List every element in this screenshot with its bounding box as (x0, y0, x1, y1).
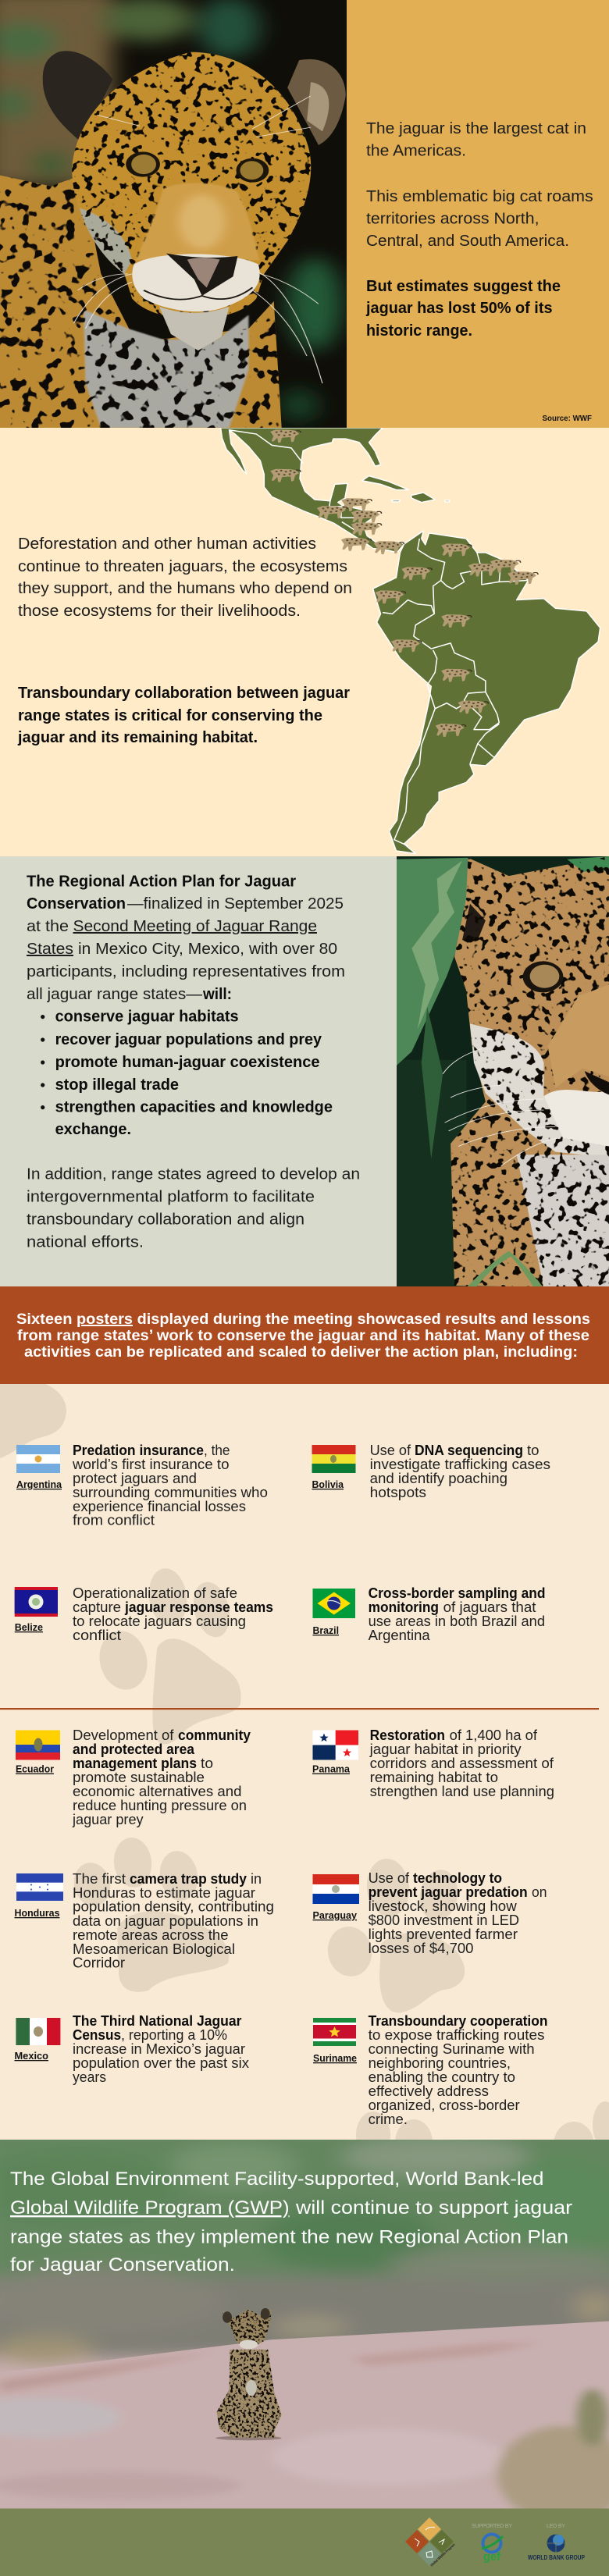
text: intergovernmental platform: transboundary collaboration and align (27, 1212, 304, 1229)
text: intergovernmental platform: In addition, range states agreed to develop an (27, 1166, 360, 1183)
item: Bolivia: to (527, 1443, 539, 1458)
photo: jaguar sitting on dirt road (0, 2119, 609, 2523)
text: transboundary collaboration: jaguar and its remaining habitat. (17, 729, 258, 746)
item: Belize: conflict (73, 1628, 121, 1643)
flag: Bolivia (312, 1445, 356, 1473)
item: Honduras: Honduras (14, 1907, 59, 1919)
item: Bolivia: hotspots (370, 1485, 426, 1500)
item: Ecuador: community (178, 1727, 251, 1743)
text: action plan intro: all jaguar range states— (27, 986, 202, 1003)
item: Honduras: Corridor (73, 1955, 125, 1971)
item: Argentina: protect jaguars and (73, 1471, 197, 1486)
item: Suriname: organized, cross-border (369, 2097, 520, 2113)
item: Honduras: The first (73, 1871, 126, 1887)
footer band with logos (0, 2509, 609, 2576)
item: Paraguay (312, 1870, 547, 1956)
flag: Suriname (313, 2018, 356, 2046)
item: Bolivia (312, 1443, 550, 1500)
item: Argentina (16, 1443, 268, 1528)
text: Global Wildlife Program support: will continue to support jaguar (295, 2197, 572, 2218)
text: jaguar facts: Central, and South America. (366, 233, 569, 250)
panel: regional action plan (0, 856, 397, 1286)
item: Brazil: Cross-border sampling and (369, 1585, 545, 1601)
item: Bolivia: DNA sequencing (415, 1443, 523, 1458)
item: Mexico: , reporting a 10% (121, 2027, 227, 2043)
logo: World Bank Group: WORLD BANK GROUP (528, 2554, 586, 2561)
text: intergovernmental platform: national efforts. (27, 1233, 144, 1251)
item: Panama: Panama (312, 1763, 351, 1775)
item: Mexico: Census (73, 2027, 121, 2043)
text: Global Wildlife Program support: for Jaguar Conservation. (10, 2254, 235, 2275)
item: Panama: jaguar habitat in priority (369, 1742, 522, 1757)
item: Belize: to relocate jaguars causing (73, 1614, 246, 1629)
item: Argentina: Predation insurance (73, 1443, 204, 1458)
flag: Honduras (16, 1873, 63, 1901)
item: Suriname: Transboundary cooperation (369, 2013, 548, 2029)
item: Honduras: data on jaguar populations in (73, 1913, 258, 1929)
text: jaguar facts: territories across North, (366, 211, 539, 228)
item: Honduras: population density, contributing (73, 1899, 274, 1915)
item: Brazil: Argentina (369, 1628, 431, 1643)
item: Suriname: enabling the country to (369, 2069, 515, 2085)
jaguar markers (270, 429, 538, 737)
list: action plan goals (41, 1009, 333, 1138)
item: Paraguay: losses of $4,700 (369, 1941, 473, 1956)
item: Suriname (313, 2013, 548, 2127)
item: Ecuador: Development of (73, 1727, 174, 1743)
item: Suriname: to expose trafficking routes (369, 2027, 545, 2043)
flag: Belize (15, 1587, 58, 1617)
item: Paraguay: on (532, 1884, 547, 1900)
item: Suriname: crime. (369, 2112, 408, 2127)
banner: sixteen posters: posters (77, 1311, 133, 1328)
list: action plan goals: recover jaguar populations and prey (55, 1031, 322, 1048)
text: transboundary collaboration: range states is critical for conserving the (18, 707, 322, 724)
item: Mexico: Mexico (14, 2050, 48, 2062)
map: jaguar range states (221, 428, 600, 854)
text: action plan intro: The Regional Action Plan for Jaguar (27, 873, 296, 891)
item: Belize: Operationalization of safe (73, 1585, 237, 1601)
item: Honduras: Honduras to estimate jaguar (73, 1885, 255, 1901)
divider rule (0, 1708, 599, 1710)
photo: jaguar half face with leaf (397, 854, 609, 1289)
item: Belize: Belize (15, 1621, 43, 1633)
text: threats: those ecosystems for their livelihoods. (18, 603, 301, 620)
text: threats (18, 535, 352, 620)
photo: jaguar portrait (0, 0, 347, 428)
item: Mexico: years (73, 2069, 106, 2085)
item: Panama: remaining habitat to (370, 1770, 498, 1785)
banner: sixteen posters: from range states’ work to conserve the jaguar and its habitat. Many of these (17, 1327, 589, 1344)
item: Brazil: use areas in both Brazil and (369, 1614, 545, 1629)
item: Panama: strengthen land use planning (370, 1784, 554, 1799)
logo: World Bank Group: LED BY (547, 2524, 565, 2529)
item: Bolivia: investigate trafficking cases (370, 1457, 550, 1472)
list: action plan goals: exchange. (55, 1121, 131, 1138)
logo: GEF: SUPPORTED BY (472, 2524, 512, 2529)
item: Paraguay: technology to (413, 1870, 502, 1886)
flag: Brazil (312, 1589, 355, 1618)
list: action plan goals: conserve jaguar habitats (55, 1009, 239, 1026)
item: Bolivia: Bolivia (312, 1478, 344, 1490)
item: Ecuador: and protected area (73, 1742, 195, 1757)
text: action plan intro (27, 873, 345, 1003)
logo: World Bank Group (528, 2524, 586, 2561)
text: action plan intro: will: (202, 986, 232, 1003)
flag: Mexico (16, 2018, 60, 2045)
text: action plan intro: States (27, 941, 73, 958)
text: action plan intro: Conservation (27, 895, 126, 913)
flag: Argentina (16, 1445, 60, 1473)
item: Mexico (14, 2013, 249, 2085)
text: jaguar facts: But estimates suggest the (366, 278, 561, 295)
text: action plan intro: in Mexico City, Mexico, with over 80 (78, 941, 337, 958)
text: action plan intro: at the (27, 918, 69, 935)
flag: Panama (312, 1730, 358, 1759)
item: Argentina: Argentina (16, 1478, 62, 1490)
flag: Ecuador (16, 1730, 60, 1759)
item: Ecuador: jaguar prey (72, 1812, 144, 1827)
text: threats: Deforestation and other human activities (18, 535, 316, 553)
text: action plan intro: Second Meeting of Jaguar Range (73, 918, 317, 935)
banner: sixteen posters: activities can be replicated and scaled to deliver the action plan, including: (24, 1343, 578, 1361)
text: transboundary collaboration: Transboundary collaboration between jaguar (18, 685, 350, 702)
item: Argentina: , the (204, 1443, 230, 1458)
item: Belize (15, 1585, 273, 1643)
source note: Source: WWF (542, 415, 592, 423)
item: Brazil: Brazil (312, 1624, 339, 1636)
paw prints background (0, 1384, 609, 2169)
text: jaguar facts: This emblematic big cat roams (366, 188, 593, 205)
text: intergovernmental platform (27, 1166, 360, 1251)
item: Belize: capture (73, 1599, 121, 1615)
logo: GEF (472, 2524, 512, 2564)
logo: Global Wildlife Program: Global Wildlife Program (429, 2542, 456, 2567)
item: Mexico: population over the past six (73, 2055, 249, 2071)
item: Argentina: surrounding communities who (73, 1485, 268, 1500)
item: Brazil: monitoring (369, 1599, 439, 1615)
item: Ecuador: to (201, 1756, 213, 1771)
item: Argentina: experience financial losses (73, 1499, 246, 1514)
item: Ecuador: management plans (73, 1756, 197, 1771)
item: Panama: Restoration (370, 1727, 445, 1743)
text: transboundary collaboration (17, 685, 350, 746)
item: Brazil (312, 1585, 545, 1643)
text: jaguar facts (365, 120, 593, 340)
banner: sixteen posters: displayed during the meeting showcased results and lessons (137, 1311, 590, 1328)
item: Argentina: world’s first insurance to (72, 1457, 230, 1472)
logo: Global Wildlife Program (405, 2517, 456, 2567)
text: action plan intro: —finalized in September 2025 (127, 895, 344, 913)
item: Ecuador: promote sustainable (73, 1770, 205, 1785)
item: Paraguay: prevent jaguar predation (369, 1884, 528, 1900)
item: Suriname: connecting Suriname with (369, 2041, 535, 2057)
flag: Paraguay (312, 1874, 359, 1904)
list: action plan goals: promote human-jaguar coexistence (55, 1054, 320, 1071)
text: threats: they support, and the humans who depend on (18, 580, 352, 597)
list: action plan goals: strengthen capacities and knowledge (55, 1099, 333, 1116)
text: Global Wildlife Program support (10, 2169, 572, 2275)
item: Ecuador: reduce hunting pressure on (73, 1798, 247, 1813)
item: Bolivia: and identify poaching (370, 1471, 508, 1486)
item: Ecuador (16, 1727, 251, 1827)
item: Paraguay: livestock, showing how (369, 1898, 518, 1914)
item: Suriname: effectively address (369, 2083, 489, 2099)
text: jaguar facts: the Americas. (366, 143, 466, 160)
item: Honduras: remote areas across the (73, 1927, 228, 1943)
item: Argentina: from conflict (73, 1513, 155, 1528)
banner: sixteen posters (0, 1286, 609, 1384)
logo: GEF: gef (483, 2550, 501, 2564)
text: Global Wildlife Program support: Global Wildlife Program (GWP) (10, 2197, 290, 2218)
banner: sixteen posters: Sixteen (16, 1311, 72, 1328)
text: action plan intro: participants, including representatives from (27, 963, 345, 980)
item: Brazil: of jaguars that (443, 1599, 536, 1615)
item: Mexico: The Third National Jaguar (73, 2013, 242, 2029)
item: Paraguay: lights prevented farmer (369, 1927, 518, 1942)
item: Panama: of 1,400 ha of (450, 1727, 538, 1743)
text: jaguar facts: historic range. (366, 322, 472, 340)
item: Paraguay: Paraguay (312, 1909, 358, 1921)
item: Honduras (14, 1871, 274, 1971)
item: Suriname: neighboring countries, (369, 2055, 511, 2071)
panel: poster examples (0, 1384, 609, 2169)
item: Bolivia: Use of (370, 1443, 411, 1458)
item: Belize: jaguar response teams (124, 1599, 273, 1615)
item: Ecuador: economic alternatives and (73, 1784, 242, 1799)
item: Honduras: Mesoamerican Biological (73, 1941, 235, 1957)
item: Honduras: camera trap study (130, 1871, 247, 1887)
item: Honduras: in (251, 1871, 262, 1887)
item: Mexico: increase in Mexico’s jaguar (73, 2041, 245, 2057)
text: intergovernmental platform: intergovernmental platform to facilitate (27, 1189, 315, 1206)
item: Paraguay: Use of (369, 1870, 410, 1886)
item: Paraguay: $800 investment in LED (369, 1912, 519, 1928)
panel: threats and map (0, 428, 609, 856)
panel: jaguar facts (347, 0, 609, 428)
item: Panama: corridors and assessment of (370, 1756, 554, 1771)
text: Global Wildlife Program support: range states as they implement the new Regional Action Plan (10, 2227, 568, 2248)
item: Ecuador: Ecuador (16, 1763, 54, 1775)
text: threats: continue to threaten jaguars, the ecosystems (18, 558, 347, 575)
text: jaguar facts: The jaguar is the largest cat in (366, 120, 586, 137)
item: Panama (312, 1727, 554, 1799)
small jaguar figure (214, 2307, 286, 2440)
item: Suriname: Suriname (313, 2052, 357, 2064)
text: Global Wildlife Program support: The Global Environment Facility-supported, World Bank-led (10, 2169, 543, 2190)
list: action plan goals: stop illegal trade (55, 1076, 179, 1094)
text: jaguar facts: jaguar has lost 50% of its (365, 300, 553, 317)
